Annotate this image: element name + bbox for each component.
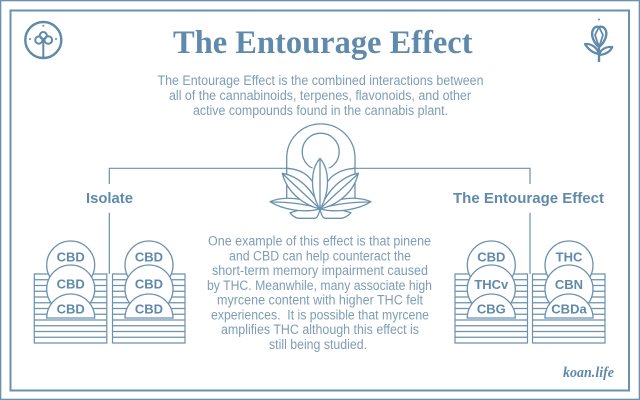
example text: short-term memory impairment caused [212,263,428,278]
stack: isolate right: CBD [135,302,163,316]
icon: lotus [270,124,371,218]
connector lines [109,168,530,274]
intro text: all of the cannabinoids, terpenes, flavonoids, and other [169,88,471,103]
stack: entourage right: CBN [555,277,583,292]
icon: plant logo [585,18,612,62]
icon: tree logo [25,22,61,58]
stack: entourage right: THC [556,250,583,264]
stack: entourage right: CBDa [551,302,587,316]
stack: isolate left: CBD [57,250,85,264]
stack: isolate left [34,241,107,343]
stack: entourage left: THCv [474,277,509,292]
stack: entourage left: CBG [477,302,506,316]
example text: still being studied. [269,337,367,352]
example text: One example of this effect is that pinene [208,234,431,248]
stack: entourage right [532,241,605,343]
intro text [158,73,484,118]
stack: isolate left: CBD [57,302,85,316]
stack: isolate right: CBD [135,276,163,292]
intro text: active compounds found in the cannabis plant. [193,103,448,118]
stack: isolate right: CBD [135,250,163,264]
stack: isolate left: CBD [57,276,85,292]
heading: Isolate: Isolate [86,191,133,207]
example text: experiences. It is possible that myrcene [211,307,429,322]
stack: entourage left: CBD [477,250,505,264]
example text: myrcene content with higher THC felt [217,292,423,308]
stack: isolate right [112,241,185,343]
heading: The Entourage Effect: The Entourage Effect [453,191,604,207]
example text [207,234,432,352]
example text: amplifies THC although this effect is [221,322,419,337]
title: The Entourage Effect [173,25,473,61]
brand: koan.life: koan.life [563,365,614,381]
example text: by THC. Meanwhile, many associate high [207,278,432,293]
example text: and CBD can help counteract the [229,248,411,263]
stack: entourage left [455,241,528,343]
intro text: The Entourage Effect is the combined interactions between [158,73,484,88]
